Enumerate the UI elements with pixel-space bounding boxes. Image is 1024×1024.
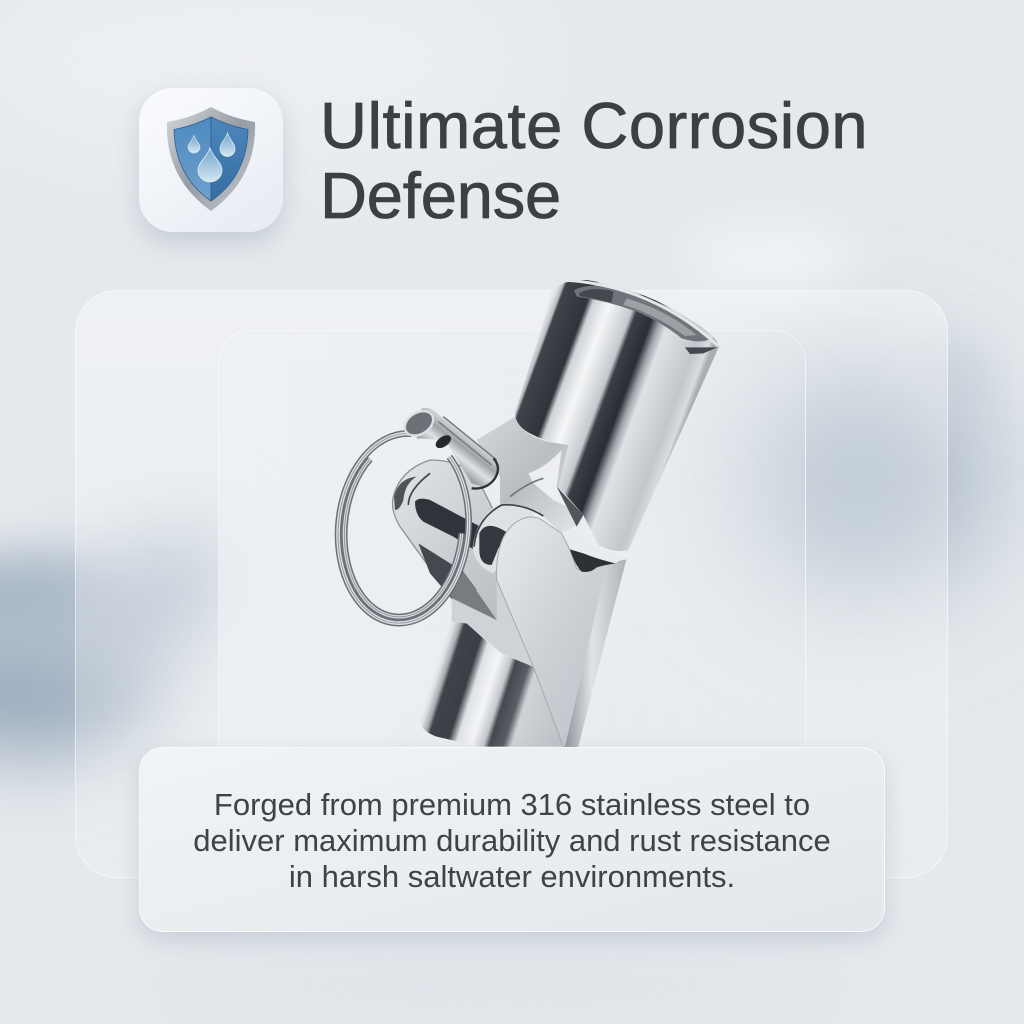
caption text: Forged from premium 316 stainless steel to (214, 787, 810, 822)
product: side lug (392, 460, 527, 620)
product: rim highlight (551, 280, 718, 346)
icon: right drop (220, 133, 235, 156)
panel: inner glass card (218, 330, 806, 878)
panel: outer glass card (75, 290, 948, 878)
caption text (193, 787, 831, 894)
product: textured lug recess (450, 572, 497, 620)
title: Ultimate Corrosion (320, 89, 868, 162)
icon: big drop (198, 148, 222, 182)
product: polished front plate (497, 517, 626, 747)
panel: caption card (139, 747, 885, 932)
product: collar between lug and lower tube (452, 580, 537, 668)
title (320, 89, 868, 232)
product: cross pin (417, 408, 499, 487)
product: split ring (330, 428, 476, 629)
product: tube bore (574, 286, 711, 341)
icon: shield face right (211, 117, 248, 201)
caption text: deliver maximum durability and rust resistance (193, 823, 831, 858)
product: saddle reflection (570, 549, 616, 572)
product: central web (477, 417, 580, 533)
product: lug slot (415, 499, 487, 553)
icon: left drop (188, 136, 200, 153)
product: pin cap (400, 406, 438, 441)
icon: shield face left (174, 117, 211, 201)
icon: shield rim (167, 107, 255, 211)
title: Defense (320, 159, 561, 232)
product: pin hole (433, 433, 453, 451)
product: lower tube (420, 622, 567, 747)
product: plate right strip (565, 560, 626, 747)
caption text: in harsh saltwater environments. (289, 859, 735, 894)
product: pivot boss (473, 503, 537, 573)
product: upper tube (515, 280, 719, 551)
icon: app tile with shield (139, 88, 283, 232)
product: rim shadow (685, 347, 717, 354)
